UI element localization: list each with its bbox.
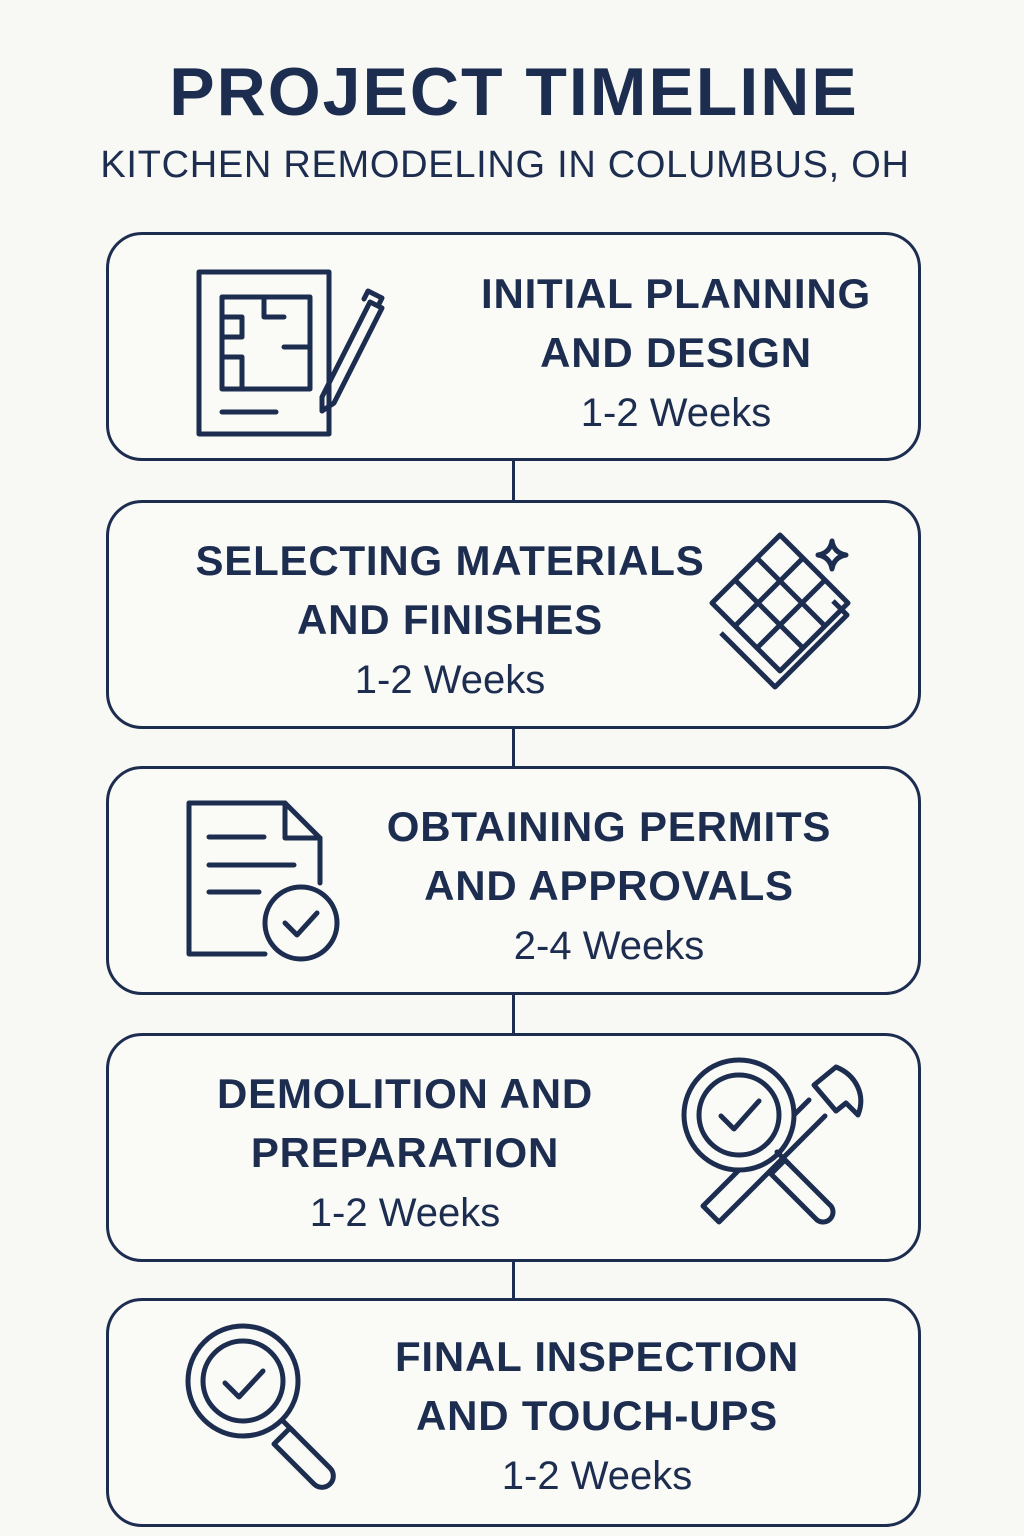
icon: tiles [710, 532, 850, 690]
panel: materials [106, 500, 921, 729]
icon: document with check [186, 800, 340, 962]
text: permits: 2-4 Weeks [514, 924, 704, 968]
text: demolition: DEMOLITION AND [217, 1070, 593, 1117]
title: PROJECT TIMELINE [169, 54, 859, 130]
text: materials: AND FINISHES [297, 596, 603, 643]
text: planning [481, 270, 871, 435]
icon: blueprint and pencil [196, 270, 384, 436]
text: inspection: 1-2 Weeks [502, 1454, 692, 1498]
subtitle: KITCHEN REMODELING IN COLUMBUS, OH [100, 144, 910, 186]
text: inspection: FINAL INSPECTION [395, 1333, 799, 1380]
panel: demolition [106, 1033, 921, 1262]
text: materials: 1-2 Weeks [355, 658, 545, 702]
panel: inspection [106, 1298, 921, 1527]
text: demolition: PREPARATION [251, 1129, 559, 1176]
icon: magnifier and hammer [682, 1058, 864, 1224]
text: permits [387, 803, 831, 968]
text: inspection [395, 1333, 799, 1498]
panel: permits [106, 766, 921, 995]
text: inspection: AND TOUCH-UPS [416, 1392, 778, 1439]
text: permits: OBTAINING PERMITS [387, 803, 831, 850]
text: planning: INITIAL PLANNING [481, 270, 871, 317]
text: materials: SELECTING MATERIALS [195, 537, 705, 584]
text: planning: AND DESIGN [540, 329, 812, 376]
text: demolition [217, 1070, 593, 1235]
icon: magnifier with check [186, 1324, 336, 1490]
text: permits: AND APPROVALS [424, 862, 794, 909]
text: planning: 1-2 Weeks [581, 391, 771, 435]
panel: planning [106, 232, 921, 461]
text: materials [195, 537, 705, 702]
text: demolition: 1-2 Weeks [310, 1191, 500, 1235]
